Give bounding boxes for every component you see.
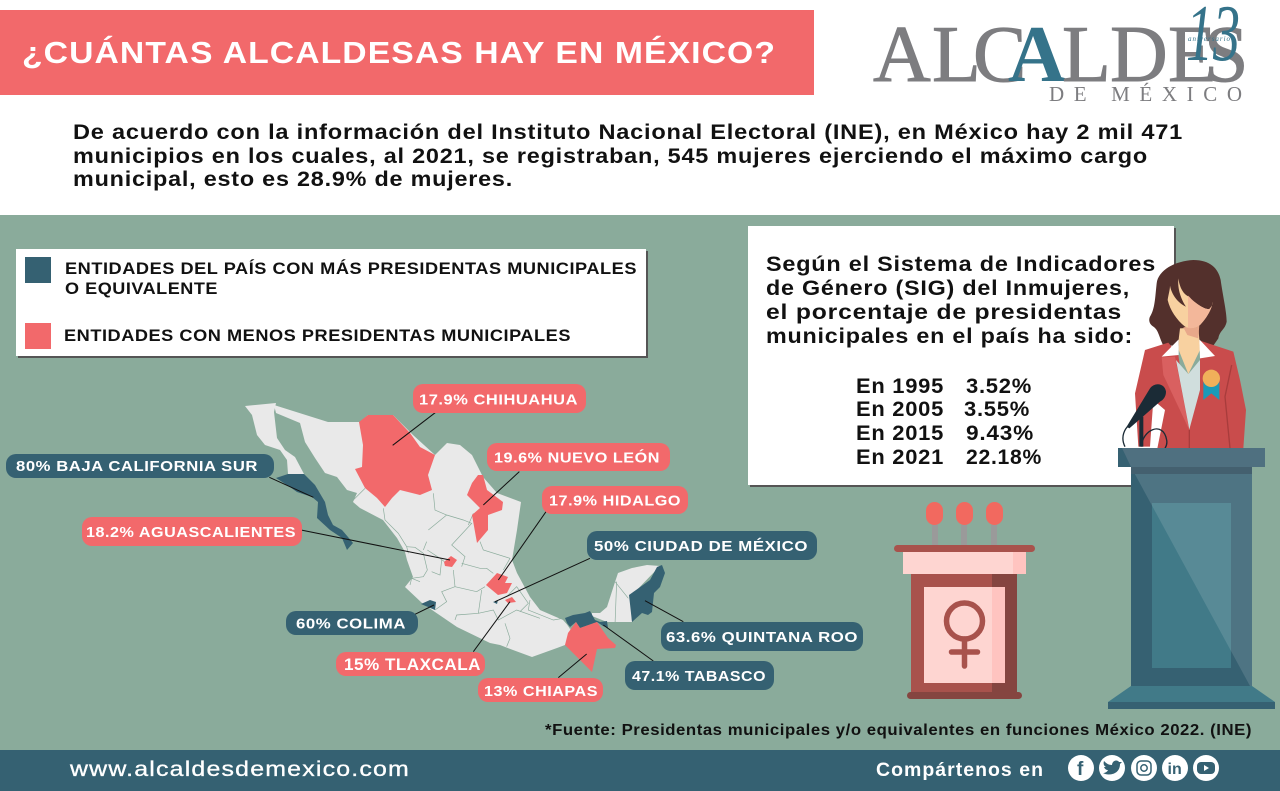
state: Ciudad de México [493, 600, 498, 604]
label: Chihuahua: 17.9% CHIHUAHUA [419, 392, 578, 408]
label: Tabasco [625, 661, 774, 690]
inner panel [924, 587, 1005, 683]
label: Ciudad de México: 50% CIUDAD DE MÉXICO [594, 538, 808, 555]
body [911, 574, 1017, 692]
medal ribbon [1203, 382, 1219, 400]
lectern highlight [1131, 467, 1252, 686]
label: Chiapas: 13% CHIAPAS [484, 683, 598, 700]
label: Tabasco: 47.1% TABASCO [632, 668, 766, 685]
icon: linkedin [1162, 755, 1188, 781]
map: state borders [353, 488, 628, 705]
label: Chiapas [478, 678, 603, 702]
yearly percentages: En 2021 [856, 446, 944, 469]
lectern panel [1152, 503, 1231, 668]
lectern body [1131, 467, 1252, 686]
legend text: fewest: ENTIDADES CON MENOS PRESIDENTAS MUNICIPALES [64, 326, 571, 345]
logo: Alcaldes de México: ALC [873, 11, 1026, 99]
state: Baja California Sur [276, 474, 353, 550]
intro text [73, 121, 1183, 191]
medal [1203, 370, 1220, 387]
label: Hidalgo [542, 486, 688, 514]
yearly percentages: 3.52% [966, 375, 1032, 398]
base [907, 692, 1022, 699]
illustration: woman at lectern [1123, 260, 1246, 448]
footer share text: Compártenos en [876, 760, 1044, 781]
legend text: most [65, 259, 637, 298]
state: Colima [421, 600, 436, 610]
map: base territory [245, 403, 660, 657]
icon: facebook [1068, 755, 1094, 781]
top block [903, 552, 1026, 574]
panel heading: Según el Sistema de Indicadores [766, 253, 1156, 276]
lapel left [1162, 357, 1189, 430]
intro text: De acuerdo con la información del Instituto Nacional Electoral (INE), en México hay 2 mil 471 [73, 121, 1183, 144]
panel: legend [16, 249, 648, 358]
panel heading: el porcentaje de presidentas [766, 301, 1122, 324]
yearly percentages [856, 375, 1042, 469]
shirt [1176, 360, 1200, 429]
legend swatch: most [25, 257, 51, 283]
logo: Alcaldes de México: LDES [1062, 11, 1248, 99]
state: Quintana Roo [629, 565, 665, 622]
label: Quintana Roo [661, 622, 863, 651]
panel heading [766, 253, 1156, 348]
footer website: www.alcaldesdemexico.com [69, 758, 410, 781]
state: Hidalgo [486, 573, 512, 595]
legend text: most: O EQUIVALENTE [65, 279, 218, 298]
logo: Alcaldes de México: A [1008, 11, 1066, 99]
state: Chiapas [565, 622, 616, 672]
lectern base bottom [1108, 702, 1275, 709]
yearly percentages: 9.43% [966, 422, 1034, 445]
state: Tabasco [565, 611, 608, 628]
jacket [1135, 341, 1246, 448]
panel heading: municipales en el país ha sido: [766, 325, 1133, 348]
microphone [1123, 384, 1167, 448]
logo: Alcaldes de México [873, 0, 1248, 106]
label: Aguascalientes: 18.2% AGUASCALIENTES [86, 524, 296, 541]
leader lines [269, 412, 683, 678]
face shade [1188, 296, 1213, 328]
icon: twitter [1099, 755, 1125, 781]
top bar [894, 545, 1035, 552]
green content background [0, 215, 1280, 750]
microphone heads [926, 502, 1003, 525]
collar [1162, 339, 1215, 358]
social icons [1068, 755, 1219, 781]
yearly percentages: 22.18% [966, 446, 1042, 469]
neck [1179, 327, 1200, 374]
logo: Alcaldes de México: DE MÉXICO [1049, 82, 1242, 106]
label: Baja California Sur: 80% BAJA CALIFORNIA SUR [16, 458, 258, 475]
yearly percentages: En 2015 [856, 422, 944, 445]
state: Aguascalientes [444, 556, 457, 567]
title banner [0, 10, 814, 95]
title banner: ¿CUÁNTAS ALCALDESAS HAY EN MÉXICO? [22, 35, 776, 70]
label: Chihuahua [413, 384, 586, 413]
state: Chihuahua [355, 415, 435, 507]
yearly percentages: En 2005 [856, 398, 944, 421]
state: Tlaxcala [505, 597, 516, 603]
legend text: most: ENTIDADES DEL PAÍS CON MÁS PRESIDENTAS MUNICIPALES [65, 259, 637, 278]
panel heading: de Género (SIG) del Inmujeres, [766, 277, 1130, 300]
icon: linkedin: in [1168, 761, 1182, 778]
intro text: municipal, esto es 28.9% de mujeres. [73, 168, 513, 191]
label: Ciudad de México [587, 531, 817, 560]
icon: facebook: f [1077, 759, 1084, 780]
lectern top [1118, 448, 1265, 467]
label: Aguascalientes [82, 517, 302, 546]
logo: Alcaldes de México: aniversario [1188, 35, 1230, 43]
label: Baja California Sur [6, 454, 274, 478]
icon: instagram [1131, 755, 1157, 781]
footer bar [0, 750, 1280, 791]
label: Nuevo León [487, 443, 670, 471]
label: Tlaxcala: 15% TLAXCALA [344, 655, 481, 674]
hair [1149, 260, 1227, 346]
label: Nuevo León: 19.6% NUEVO LEÓN [494, 448, 660, 466]
lectern under-top shadow [1131, 467, 1252, 474]
label: Quintana Roo: 63.6% QUINTANA ROO [666, 629, 858, 646]
intro text: municipios en los cuales, al 2021, se registraban, 545 mujeres ejerciendo el máximo cargo [73, 145, 1148, 168]
label: Colima [286, 611, 418, 635]
label: Hidalgo: 17.9% HIDALGO [549, 492, 681, 510]
source note: *Fuente: Presidentas municipales y/o equivalentes en funciones México 2022. (INE) [545, 722, 1252, 739]
large lectern [1108, 448, 1275, 709]
neck shadow [1183, 325, 1199, 338]
legend swatch: fewest [25, 323, 51, 349]
label: Colima: 60% COLIMA [296, 616, 406, 632]
yearly percentages: 3.55% [964, 398, 1030, 421]
lectern base top [1108, 686, 1275, 702]
panel: SIG percentages [748, 226, 1176, 487]
icon: youtube [1193, 755, 1219, 781]
face [1168, 278, 1213, 328]
female symbol [946, 603, 982, 666]
map of Mexico [245, 403, 683, 705]
jacket fold [1189, 365, 1232, 448]
microphone stems [932, 525, 997, 545]
yearly percentages: En 1995 [856, 375, 944, 398]
small lectern with female symbol [894, 502, 1035, 699]
state: Nuevo León [467, 475, 503, 543]
